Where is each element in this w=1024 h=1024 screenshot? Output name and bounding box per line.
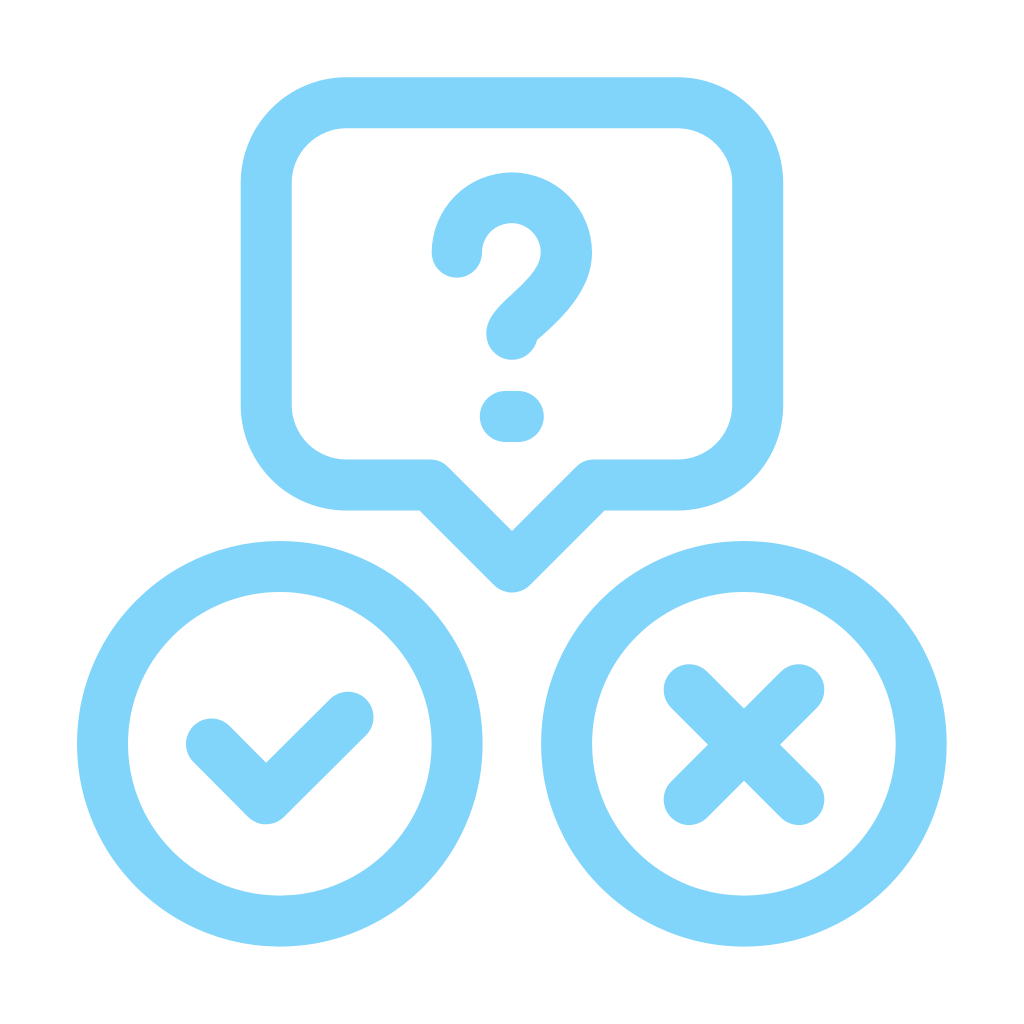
icon: question mark bbox=[432, 172, 592, 416]
icon: cross mark bbox=[689, 690, 799, 800]
icon: right circle outline bbox=[567, 566, 921, 921]
icon: check mark bbox=[212, 717, 348, 799]
icon: left circle outline bbox=[102, 566, 457, 921]
icon: speech bubble outline bbox=[266, 103, 758, 567]
